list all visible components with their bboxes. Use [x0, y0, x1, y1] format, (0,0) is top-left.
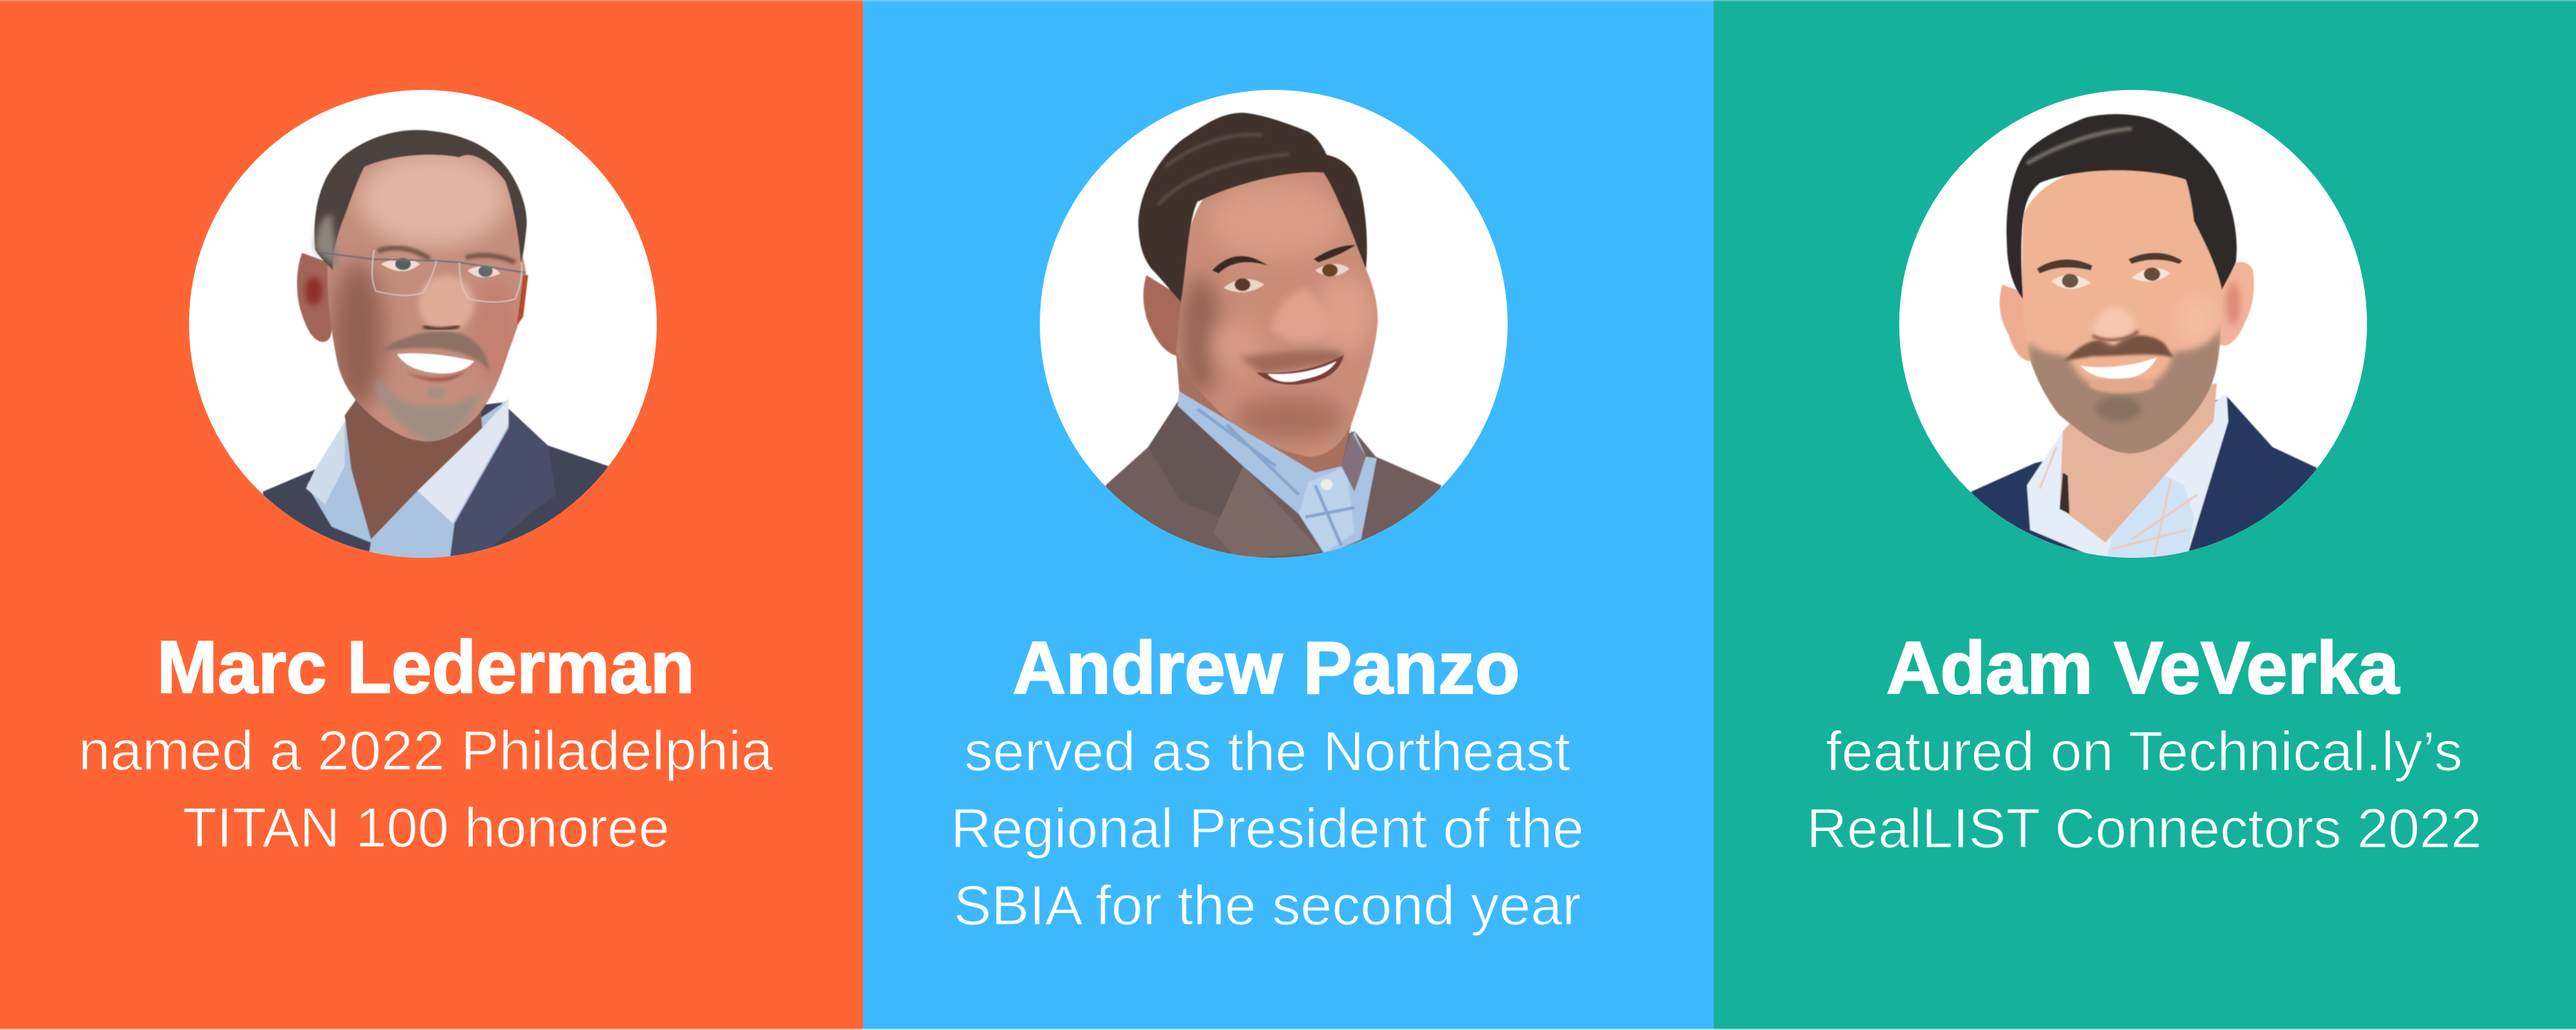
description: Andrew Panzo: [951, 720, 1584, 937]
portrait: Adam VeVerka: [1971, 114, 2316, 581]
description: Adam VeVerka: RealLIST Connectors 2022: [1806, 797, 2482, 860]
description: Marc Lederman: named a 2022 Philadelphia: [78, 719, 774, 782]
description: Marc Lederman: TITAN 100 honoree: [183, 796, 670, 859]
name: Andrew Panzo: Andrew Panzo: [1013, 627, 1520, 710]
orange panel background: [0, 0, 863, 1030]
description: Adam VeVerka: featured on Technical.ly’s: [1826, 720, 2463, 782]
description: Andrew Panzo: served as the Northeast: [964, 720, 1570, 782]
white portrait circle: [189, 90, 657, 558]
name: Marc Lederman: Marc Lederman: [157, 626, 695, 709]
portrait: Marc Lederman: [263, 130, 608, 581]
name: Adam VeVerka: Adam VeVerka: [1886, 627, 2400, 710]
white portrait circle: [1899, 90, 2367, 558]
description: Andrew Panzo: SBIA for the second year: [954, 874, 1581, 937]
portrait: Andrew Panzo: [1105, 113, 1441, 581]
teal panel background: [1714, 0, 2576, 1030]
description: Adam VeVerka: [1806, 720, 2482, 860]
description: Andrew Panzo: Regional President of the: [951, 797, 1584, 860]
panel: Andrew Panzo: [863, 0, 1714, 1030]
panel: Adam VeVerka: [1714, 0, 2576, 1030]
description: Marc Lederman: [78, 719, 774, 859]
panel: Marc Lederman: [0, 0, 863, 1030]
blue panel background: [863, 0, 1714, 1030]
white portrait circle: [1040, 90, 1508, 558]
